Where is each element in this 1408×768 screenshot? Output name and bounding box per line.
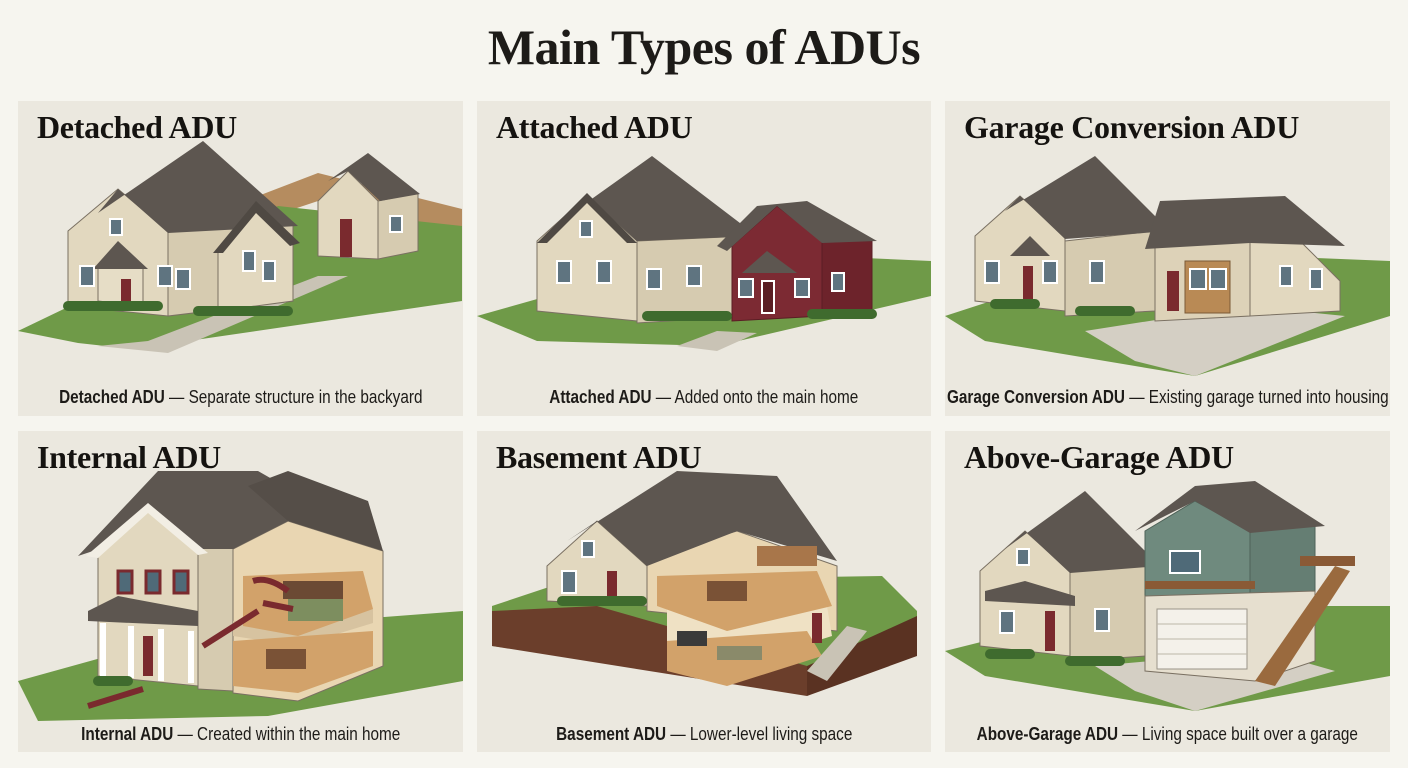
illustration: house with apartment over garage — [945, 481, 1390, 711]
illustration: house cutaway with basement unit — [492, 471, 917, 696]
heading: garage conversion: Garage Conversion ADU — [964, 109, 1299, 145]
illustration: detached house with backyard cottage — [18, 141, 462, 353]
panel: above-garage ADU — [945, 431, 1390, 752]
caption: garage conversion: Garage Conversion ADU — Existing garage turned into housing — [947, 387, 1388, 407]
panel: detached ADU — [18, 101, 463, 416]
caption: attached: Attached ADU — Added onto the main home — [549, 387, 858, 407]
heading: basement: Basement ADU — [496, 439, 701, 475]
panel: basement ADU — [477, 431, 931, 752]
caption: basement: Basement ADU — Lower-level living space — [556, 724, 852, 744]
heading: detached: Detached ADU — [37, 109, 237, 145]
panel: internal ADU — [18, 431, 463, 752]
title: Main Types of ADUs — [488, 19, 920, 75]
caption: detached: Detached ADU — Separate structure in the backyard — [59, 387, 422, 407]
illustration: house with attached red addition — [477, 156, 931, 351]
caption: internal: Internal ADU — Created within the main home — [81, 724, 400, 744]
heading: above-garage: Above-Garage ADU — [964, 439, 1234, 475]
panel: attached ADU — [477, 101, 931, 416]
heading: internal: Internal ADU — [37, 439, 221, 475]
heading: attached: Attached ADU — [496, 109, 692, 145]
illustration: house with converted garage — [945, 156, 1390, 376]
panel: garage conversion ADU — [945, 101, 1390, 416]
caption: above-garage: Above-Garage ADU — Living space built over a garage — [977, 724, 1358, 744]
illustration: cutaway house with interior unit — [18, 471, 463, 721]
